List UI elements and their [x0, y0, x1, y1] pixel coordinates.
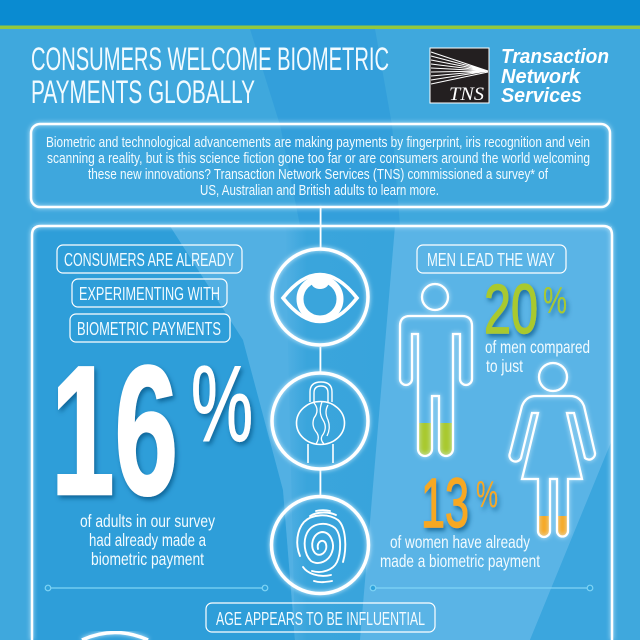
bottom circle	[82, 632, 148, 640]
panel: main	[32, 226, 612, 640]
divider right	[370, 585, 593, 591]
big number: 16%: 16	[51, 327, 178, 533]
top band	[0, 0, 640, 26]
stat: 20% men: %	[543, 280, 567, 322]
heading: men lead the way	[417, 245, 566, 273]
text: adults in survey	[80, 511, 215, 569]
heading: consumers are already experimenting	[57, 245, 242, 342]
intro text: these new innovations? Transaction Network Services (TNS) commissioned a survey* of	[88, 167, 549, 183]
panel: intro	[31, 124, 610, 207]
logo wordmark: Transaction	[501, 45, 609, 68]
icon: fingerprint	[272, 496, 368, 594]
icon: man figure	[400, 284, 472, 456]
heading: consumers are already experimenting: BIOMETRIC PAYMENTS	[77, 319, 221, 339]
logo: TNS	[430, 45, 609, 107]
text: men compared: of men compared	[485, 337, 590, 357]
heading: men lead the way: MEN LEAD THE WAY	[427, 250, 555, 270]
intro text: US, Australian and British adults to learn more.	[200, 183, 439, 199]
text: men compared: to just	[486, 356, 523, 376]
stat: 20% men: 20	[484, 270, 538, 348]
intro text	[46, 135, 590, 199]
icon: woman figure	[509, 363, 595, 537]
logo mark	[430, 48, 489, 105]
title: CONSUMERS WELCOME BIOMETRIC	[31, 41, 389, 77]
icon: finger vein	[272, 373, 368, 469]
logo wordmark: Services	[501, 84, 582, 107]
heading: age appears to be influential: AGE APPEARS TO BE INFLUENTIAL	[216, 609, 425, 629]
heading: consumers are already experimenting: CONSUMERS ARE ALREADY	[64, 250, 234, 270]
big number: 16%: %	[191, 343, 253, 464]
icon: eye	[272, 249, 368, 345]
heading: age appears to be influential	[206, 603, 435, 632]
connector lines	[320, 207, 321, 495]
title: PAYMENTS GLOBALLY	[31, 74, 255, 110]
stat: 13% women: %	[476, 474, 498, 516]
text: adults in survey: had already made a	[89, 530, 206, 550]
text: women: made a biometric payment	[380, 551, 540, 571]
text: adults in survey: of adults in our survey	[80, 511, 215, 531]
text: men compared	[485, 337, 590, 376]
green rule	[0, 26, 640, 29]
logo wordmark	[501, 45, 609, 107]
text: women: of women have already	[390, 532, 530, 552]
text: adults in survey: biometric payment	[91, 549, 204, 569]
logo mark: TNS	[449, 84, 485, 105]
text: women	[380, 532, 540, 571]
title	[31, 41, 389, 110]
heading: consumers are already experimenting: EXPERIMENTING WITH	[79, 284, 220, 304]
divider left	[45, 585, 268, 591]
stat: 13% women: 13	[421, 464, 469, 542]
logo wordmark: Network	[501, 65, 582, 88]
